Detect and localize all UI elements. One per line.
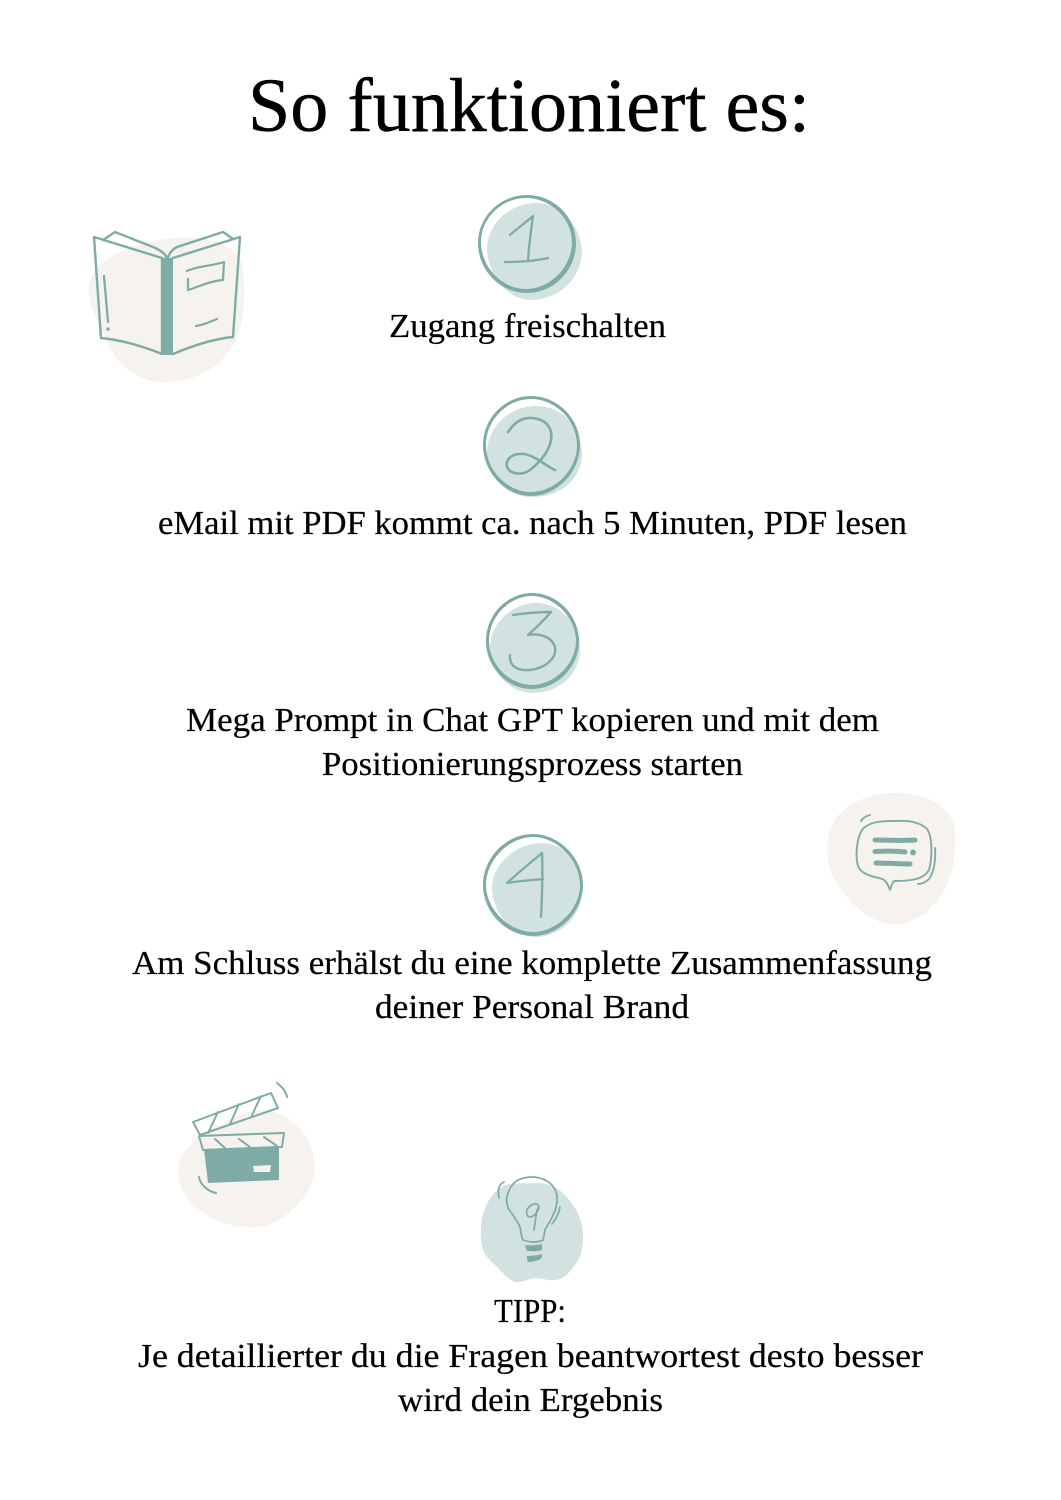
step 4 badge <box>483 834 583 937</box>
step 3 text: Mega Prompt in Chat GPT kopieren und mit dem <box>186 702 879 739</box>
tip text <box>138 1293 923 1419</box>
tip text: TIPP: <box>494 1293 566 1330</box>
title: So funktioniert es: <box>248 64 810 148</box>
step 4 text <box>132 945 932 1026</box>
step 2 badge <box>483 396 582 497</box>
tip text: wird dein Ergebnis <box>398 1382 663 1419</box>
step 1 text: Zugang freischalten <box>389 308 666 345</box>
icon: light bulb <box>481 1177 583 1282</box>
tip text: Je detaillierter du die Fragen beantwortest desto besser <box>138 1338 923 1375</box>
step 4 text: deiner Personal Brand <box>375 989 689 1026</box>
icon: open book <box>89 232 245 382</box>
step 2 text: eMail mit PDF kommt ca. nach 5 Minuten, PDF lesen <box>158 505 907 542</box>
numeral 3 <box>510 612 555 670</box>
numeral 1 <box>505 216 548 262</box>
icon: film clapper <box>178 1083 315 1227</box>
icon: speech bubble <box>827 793 955 924</box>
step 3 text: Positionierungsprozess starten <box>322 746 743 783</box>
step 1 badge <box>478 195 582 300</box>
numeral 4 <box>507 853 543 917</box>
numeral 2 <box>507 418 555 474</box>
step 4 text: Am Schluss erhälst du eine komplette Zusammenfassung <box>132 945 932 982</box>
step 3 badge <box>486 593 580 693</box>
step 3 text <box>186 702 879 783</box>
